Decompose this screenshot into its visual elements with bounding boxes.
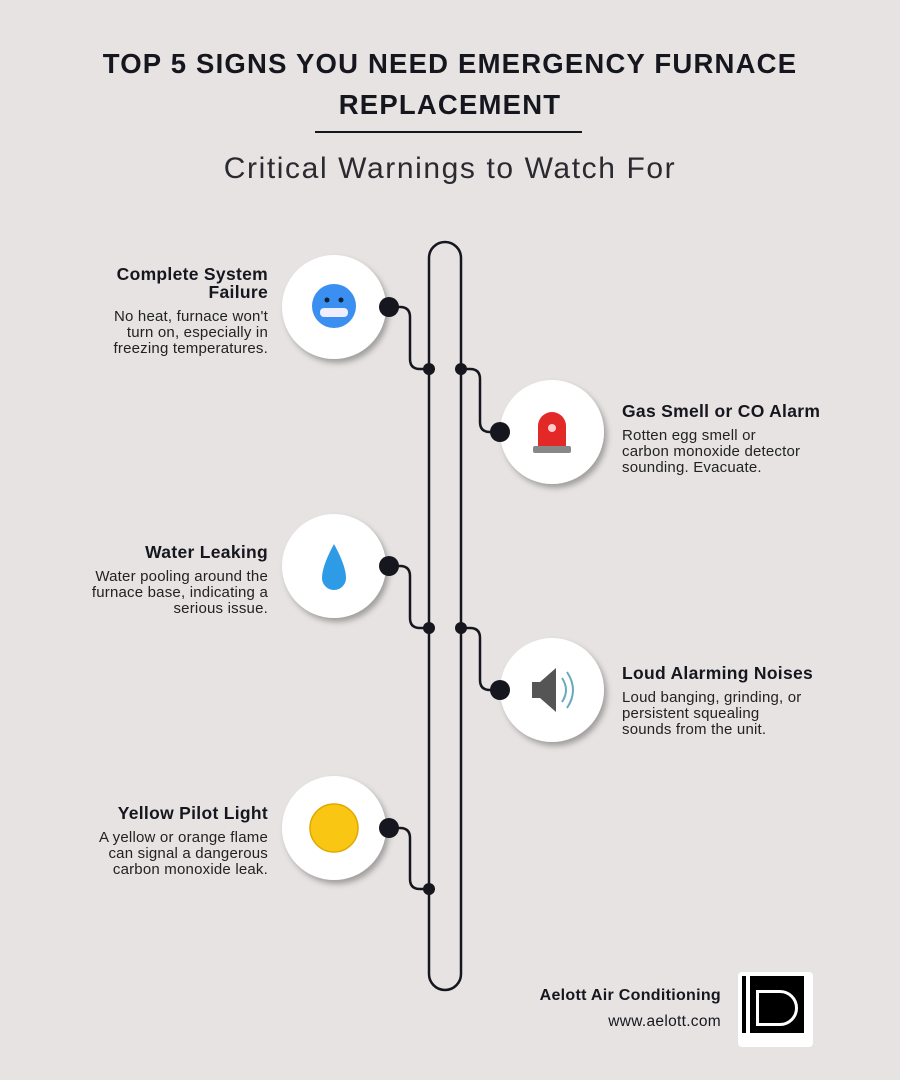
item 2 circle: siren	[490, 380, 604, 484]
text: water leaking: serious issue.	[173, 600, 268, 617]
text: complete system failure: freezing temperatures.	[114, 340, 268, 357]
item 4 circle: speaker	[490, 638, 604, 742]
text: water leaking: Water pooling around the	[95, 568, 268, 585]
text: loud noises: persistent squealing	[622, 705, 759, 722]
text: gas smell: Gas Smell or CO Alarm	[622, 401, 820, 421]
item 5 circle: yellow circle	[282, 776, 399, 880]
title: REPLACEMENT	[339, 89, 561, 120]
text: yellow pilot light: can signal a dangerous	[108, 845, 268, 862]
title underline	[315, 131, 582, 133]
text: yellow pilot light: A yellow or orange flame	[99, 829, 268, 846]
text: gas smell	[622, 401, 820, 476]
text: complete system failure	[114, 264, 268, 357]
text: complete system failure: turn on, especially in	[127, 324, 268, 341]
text: gas smell: sounding. Evacuate.	[622, 459, 762, 476]
text: yellow pilot light: Yellow Pilot Light	[118, 803, 268, 823]
text: loud noises	[622, 663, 813, 738]
footer brand: www.aelott.com	[608, 1013, 721, 1030]
footer brand	[540, 987, 721, 1030]
item 3 circle: water drop	[282, 514, 399, 618]
text: yellow pilot light: carbon monoxide leak.	[113, 861, 268, 878]
text: water leaking: furnace base, indicating a	[92, 584, 268, 601]
text: gas smell: carbon monoxide detector	[622, 443, 800, 460]
text: water leaking: Water Leaking	[145, 542, 268, 562]
text: water leaking	[92, 542, 268, 617]
subtitle: Critical Warnings to Watch For	[224, 152, 676, 185]
footer brand: Aelott Air Conditioning	[540, 987, 721, 1004]
title	[103, 48, 797, 120]
text: loud noises: Loud Alarming Noises	[622, 663, 813, 683]
item 1 circle: cold face	[282, 255, 399, 359]
text: complete system failure: No heat, furnace won't	[114, 308, 268, 325]
text: loud noises: Loud banging, grinding, or	[622, 689, 802, 706]
text: yellow pilot light	[99, 803, 268, 878]
text: loud noises: sounds from the unit.	[622, 721, 766, 738]
title: TOP 5 SIGNS YOU NEED EMERGENCY FURNACE	[103, 48, 797, 79]
text: complete system failure: Complete System	[117, 264, 268, 284]
text: complete system failure: Failure	[209, 282, 268, 302]
text: gas smell: Rotten egg smell or	[622, 427, 756, 444]
logo	[738, 972, 813, 1047]
